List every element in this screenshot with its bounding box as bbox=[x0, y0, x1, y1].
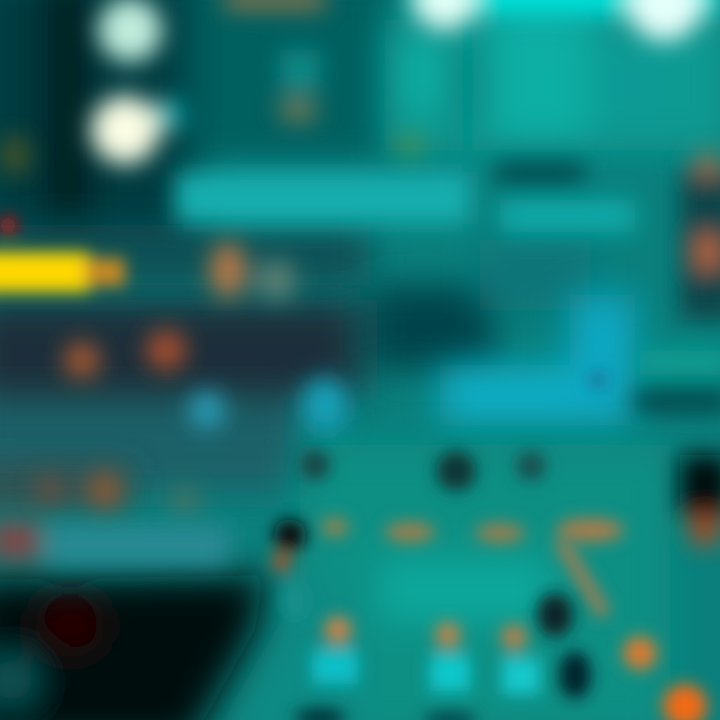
row of orange labels bbox=[321, 517, 624, 543]
bars: cyan with orange tops bbox=[312, 616, 540, 694]
panel: top right teal bbox=[385, 10, 720, 150]
icon: blue dots bbox=[189, 377, 349, 433]
label: orange top marks bbox=[1, 0, 424, 175]
panel: bottom left dark bbox=[0, 470, 265, 720]
panel: bottom teal bbox=[210, 445, 670, 720]
icon: dark blob centre bbox=[272, 519, 591, 720]
right edge dark band bbox=[635, 152, 720, 546]
highlight: yellow bar bbox=[0, 216, 125, 292]
band: central heading bbox=[175, 162, 635, 232]
arrow: orange diagonal bbox=[560, 540, 707, 720]
icon: glowing circles top bbox=[410, 0, 720, 41]
label: orange and grey marks bbox=[36, 242, 296, 509]
icon: dark dots bbox=[300, 370, 608, 491]
panel: blue chart area bbox=[440, 295, 635, 425]
icon: glowing circles left bbox=[91, 0, 184, 164]
panel: central dark band bbox=[0, 240, 590, 490]
panel: top left dark bbox=[0, 0, 390, 285]
band: bottom left heading bbox=[0, 522, 230, 565]
